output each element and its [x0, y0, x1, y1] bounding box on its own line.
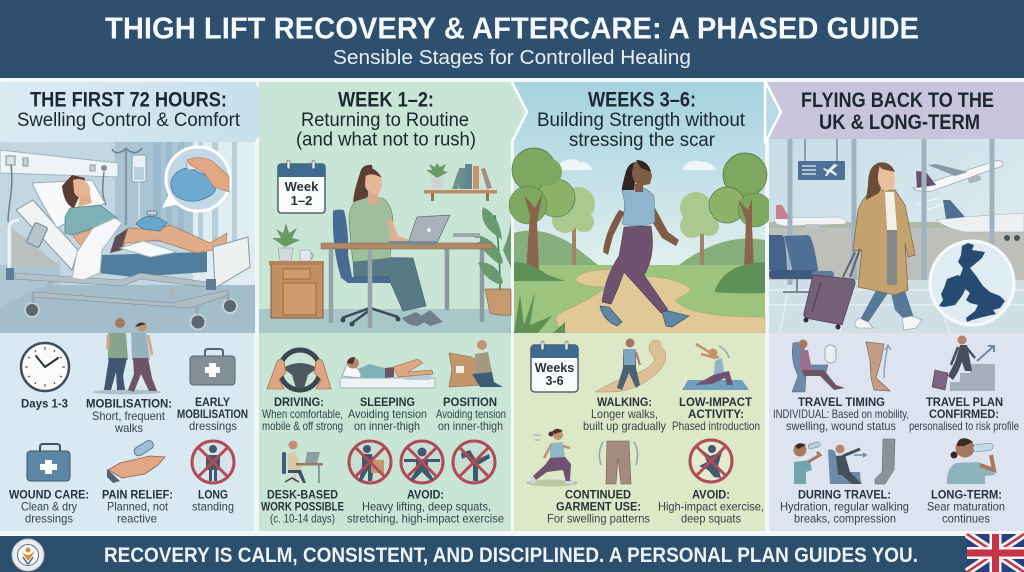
- header: week 1-2: (and what not to rush): [296, 130, 476, 151]
- label: long standing: LONG: [198, 488, 228, 502]
- label: desk-based work possible: (c. 10-14 days): [270, 512, 335, 526]
- icon: calendar weeks 3-6: 3-6: [545, 374, 564, 388]
- flying plane: [913, 161, 1003, 212]
- label: long standing: standing: [192, 500, 234, 514]
- header: the first 72 hours: Swelling Control & Comfort: [17, 110, 241, 131]
- label: mobilisation: Short, frequent: [92, 409, 166, 423]
- label: avoid: deep squats: [681, 512, 741, 526]
- white sheet: [72, 218, 122, 280]
- icon: no deep squats: [401, 441, 443, 483]
- label: avoid: [658, 488, 764, 526]
- shelf with plant and books: [424, 163, 497, 201]
- label: position: [436, 395, 506, 433]
- label: days 1-3: Days 1-3: [21, 396, 68, 410]
- label: during travel: Hydration, regular walking: [780, 500, 909, 514]
- label: desk-based work possible: DESK-BASED: [267, 488, 338, 502]
- header: flying back: [765, 81, 1024, 143]
- label: pain relief: Planned, not: [107, 500, 169, 514]
- icon: calendar week 1-2: Week: [285, 179, 319, 194]
- icon: calendar weeks 3-6: Weeks: [535, 361, 574, 375]
- label: driving: mobile & off strong: [262, 419, 343, 433]
- label: mobilisation: walks: [114, 421, 143, 435]
- pillow: [32, 180, 105, 228]
- label: travel plan confirmed: TRAVEL PLAN: [926, 395, 1003, 409]
- header: flying back: FLYING BACK TO THE: [801, 89, 994, 112]
- label: low-impact activity: Phased introduction: [672, 419, 760, 433]
- label: sleeping: SLEEPING: [360, 395, 415, 409]
- bed frame: [213, 237, 250, 288]
- header: week 1-2: Returning to Routine: [301, 110, 469, 131]
- window mullions: [790, 139, 992, 285]
- label: low-impact activity: LOW-IMPACT: [679, 395, 753, 409]
- icon: position, person packing: [449, 340, 503, 387]
- header: week 1-2: WEEK 1–2:: [338, 89, 434, 112]
- icon: compression stocking leg: [866, 342, 891, 391]
- label: pain relief: PAIN RELIEF:: [102, 488, 173, 502]
- label: pain relief: [102, 488, 173, 526]
- panel: weeks 3-6: [509, 82, 772, 531]
- header: the first 72 hours: THE FIRST 72 HOURS:: [30, 89, 227, 112]
- label: long-term: continues: [942, 512, 990, 526]
- label: mobilisation: MOBILISATION:: [86, 396, 172, 410]
- icon: blue first aid case: [27, 444, 70, 481]
- lower panel: first 72 hours actions: [0, 318, 254, 531]
- icon: calendar week 1-2: [278, 160, 325, 213]
- title banner: [0, 0, 1024, 78]
- panel: the first 72 hours: [0, 82, 272, 531]
- panel: flying back to the UK: [765, 81, 1024, 531]
- label: wound care: WOUND CARE:: [9, 488, 89, 502]
- label: wound care: Clean & dry: [21, 500, 77, 514]
- label: long-term: [927, 488, 1005, 526]
- label: walking: [583, 395, 666, 433]
- icon: desk-based work: [282, 440, 323, 483]
- label: wound care: [9, 488, 89, 526]
- lower panel: weeks 3-6 actions: [514, 333, 765, 531]
- footer banner: [0, 534, 1024, 572]
- header: the first 72 hours: [0, 82, 272, 142]
- label: long-term: LONG-TERM:: [931, 488, 1002, 502]
- header: weeks 3-6: Building Strength without: [537, 110, 746, 131]
- icon: compression sock: [875, 439, 895, 484]
- header: weeks 3-6: [512, 82, 746, 151]
- label: early mobilisation: MOBILISATION: [177, 407, 248, 421]
- headboard frame: [9, 220, 19, 268]
- label: travel timing: INDIVIDUAL: Based on mobility,: [773, 407, 909, 421]
- label: avoid: stretching, high-impact exercise: [347, 512, 504, 526]
- label: travel plan confirmed: [909, 395, 1019, 433]
- label: driving: When comfortable,: [262, 407, 343, 421]
- label: early mobilisation: EARLY: [195, 395, 230, 409]
- icon: traveller climbing stairs: [932, 336, 995, 391]
- icon: woman drinking: [947, 438, 995, 484]
- header: week 1-2: [262, 82, 527, 151]
- scene: woman walking in park: [509, 82, 772, 333]
- label: sleeping: Avoiding tension: [348, 407, 427, 421]
- mattress: [98, 252, 207, 277]
- desk and laptop: [321, 215, 493, 328]
- desk back legs: [447, 249, 482, 322]
- label: mobilisation: [86, 396, 172, 435]
- label: long-term: Sear maturation: [927, 500, 1005, 514]
- label: driving: [262, 395, 343, 433]
- label: travel timing: TRAVEL TIMING: [798, 395, 885, 409]
- label: long standing: [192, 488, 234, 514]
- label: during travel: breaks, compression: [794, 512, 896, 526]
- label: position: POSITION: [443, 395, 497, 409]
- icon: calendar week 1-2: 1–2: [291, 193, 312, 208]
- label: walking: Longer walks,: [591, 407, 658, 421]
- label: continued garment use: [547, 488, 650, 526]
- suitcase: [804, 249, 860, 330]
- label: position: Avoiding tension: [436, 407, 506, 421]
- icon: seated traveller: [792, 340, 845, 392]
- icon: UK flag: [967, 534, 1024, 572]
- icon: seat and stretch: [828, 444, 866, 484]
- icon: walking on path: [595, 338, 666, 392]
- label: sleeping: [348, 395, 427, 433]
- lower panel: week 1-2 actions: [259, 333, 511, 531]
- scene: woman working at desk: [259, 82, 511, 333]
- icon: steering wheel: [267, 350, 331, 390]
- chair: [333, 210, 400, 326]
- icon: hydration during travel: [794, 442, 821, 484]
- icon: sleeping on back: [340, 357, 435, 388]
- ice pack on knee: [136, 216, 167, 231]
- header: weeks 3-6: WEEKS 3–6:: [588, 89, 696, 112]
- woman at laptop: [349, 165, 443, 326]
- backrest: [16, 200, 78, 270]
- body: [65, 205, 117, 235]
- label: walking: built up gradually: [583, 419, 666, 433]
- label: avoid: AVOID:: [692, 488, 730, 502]
- callout: ice pack: [162, 147, 230, 211]
- lower panel: long-term actions: [769, 333, 1024, 531]
- icon: runner: [526, 429, 578, 486]
- head: [62, 175, 85, 208]
- parked plane left: [774, 205, 846, 230]
- icon: clock: [21, 343, 69, 391]
- subtitle: Sensible Stages for Controlled Healing: [333, 47, 691, 69]
- panel: week 1-2: [259, 82, 527, 531]
- bed side bar: [15, 273, 207, 287]
- label: desk-based work possible: [261, 488, 344, 526]
- icon: no long standing: [192, 441, 234, 483]
- label: avoid: AVOID:: [407, 488, 444, 502]
- title: THIGH LIFT RECOVERY & AFTERCARE: A PHASED GUIDE: [105, 10, 919, 46]
- label: low-impact activity: [672, 395, 760, 433]
- label: position: on inner-thigh: [438, 419, 503, 433]
- label: pain relief: reactive: [117, 512, 157, 526]
- label: driving: DRIVING:: [274, 395, 324, 409]
- label: travel timing: [773, 395, 909, 433]
- icon: calendar weeks 3-6: [531, 341, 578, 392]
- icon: compression leggings: [599, 441, 638, 484]
- label: travel timing: swelling, wound status: [786, 419, 896, 433]
- icon: two people walking: [93, 318, 161, 394]
- map: UK and Ireland: [930, 241, 1014, 325]
- bedside cabinet: [269, 223, 324, 318]
- sign: flight departures: [798, 139, 845, 180]
- knee pillow: [120, 241, 177, 257]
- label: desk-based work possible: WORK POSSIBLE: [261, 500, 344, 514]
- parked plane right: [936, 200, 1024, 241]
- icon: yoga lunge on mat: [682, 344, 749, 390]
- logo badge: [12, 539, 44, 571]
- label: continued garment use: CONTINUED: [565, 488, 631, 502]
- label: continued garment use: For swelling patterns: [547, 512, 650, 526]
- woman with coat and suitcase: [853, 162, 922, 330]
- label: early mobilisation: [177, 395, 248, 433]
- seats: [769, 235, 834, 292]
- label: during travel: [780, 488, 909, 526]
- label: sleeping: on inner-thigh: [354, 419, 420, 433]
- label: low-impact activity: ACTIVITY:: [688, 407, 744, 421]
- icon: gray first aid case: [190, 349, 235, 385]
- label: avoid: Heavy lifting, deep squats,: [362, 500, 491, 514]
- header: weeks 3-6: stressing the scar: [569, 130, 716, 151]
- icon: no high impact: [690, 440, 732, 482]
- header: flying back: UK & LONG-TERM: [819, 111, 980, 134]
- label: wound care: dressings: [25, 512, 73, 526]
- plant right: [473, 207, 511, 315]
- icon: no high-impact exercise: [453, 441, 495, 483]
- scene: woman in airport: [769, 139, 1024, 333]
- label: avoid: High-impact exercise,: [658, 500, 764, 514]
- woman walking: [600, 160, 689, 327]
- icon: hand and capsule: [107, 439, 165, 483]
- scene: patient in hospital bed: [0, 140, 255, 333]
- label: walking: WALKING:: [597, 395, 652, 409]
- label: avoid: [347, 488, 504, 526]
- label: during travel: DURING TRAVEL:: [798, 488, 891, 502]
- label: travel plan confirmed: CONFIRMED:: [929, 407, 999, 421]
- icon: no heavy lifting: [349, 441, 391, 483]
- label: continued garment use: GARMENT USE:: [556, 500, 641, 514]
- label: early mobilisation: dressings: [189, 419, 237, 433]
- closing message: RECOVERY IS CALM, CONSISTENT, AND DISCIPLINED. A PERSONAL PLAN GUIDES YOU.: [104, 544, 918, 567]
